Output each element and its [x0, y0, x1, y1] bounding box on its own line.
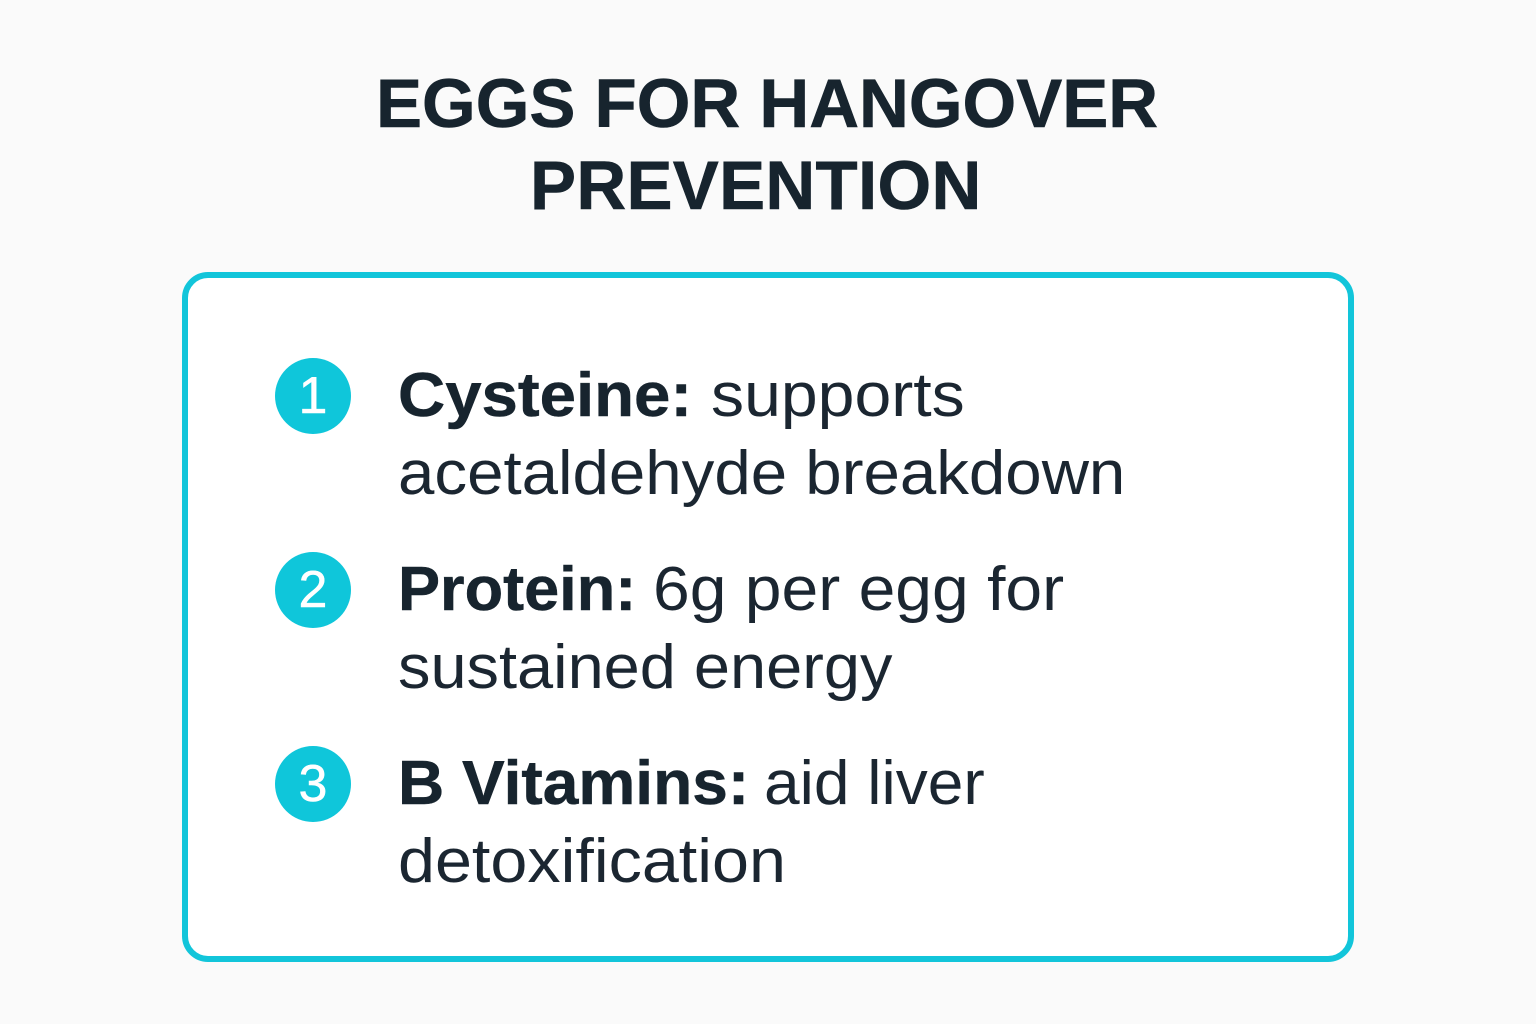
text: b vitamins: aid liver	[764, 749, 985, 818]
icon: number 1: 1	[299, 367, 327, 425]
text: cysteine	[398, 361, 1125, 508]
icon: number 2	[275, 552, 351, 628]
icon: number 2: 2	[299, 561, 327, 619]
title	[376, 65, 1158, 224]
panel: benefits list	[182, 272, 1354, 962]
icon: number 3: 3	[299, 755, 327, 813]
text: protein: Protein:	[398, 555, 636, 624]
text: protein	[398, 555, 1064, 702]
title: PREVENTION	[530, 147, 982, 224]
text: b vitamins: B Vitamins:	[398, 749, 749, 818]
icon: number 3	[275, 746, 351, 822]
text: b vitamins: detoxification	[398, 827, 786, 896]
title: EGGS FOR HANGOVER	[376, 65, 1158, 142]
text: cysteine: supports	[711, 361, 965, 430]
icon: number 1	[275, 358, 351, 434]
text: cysteine: acetaldehyde breakdown	[398, 439, 1125, 508]
text: protein: 6g per egg for	[653, 555, 1064, 624]
text: cysteine: Cysteine:	[398, 361, 692, 430]
text: b vitamins	[398, 749, 985, 896]
text: protein: sustained energy	[398, 633, 892, 702]
